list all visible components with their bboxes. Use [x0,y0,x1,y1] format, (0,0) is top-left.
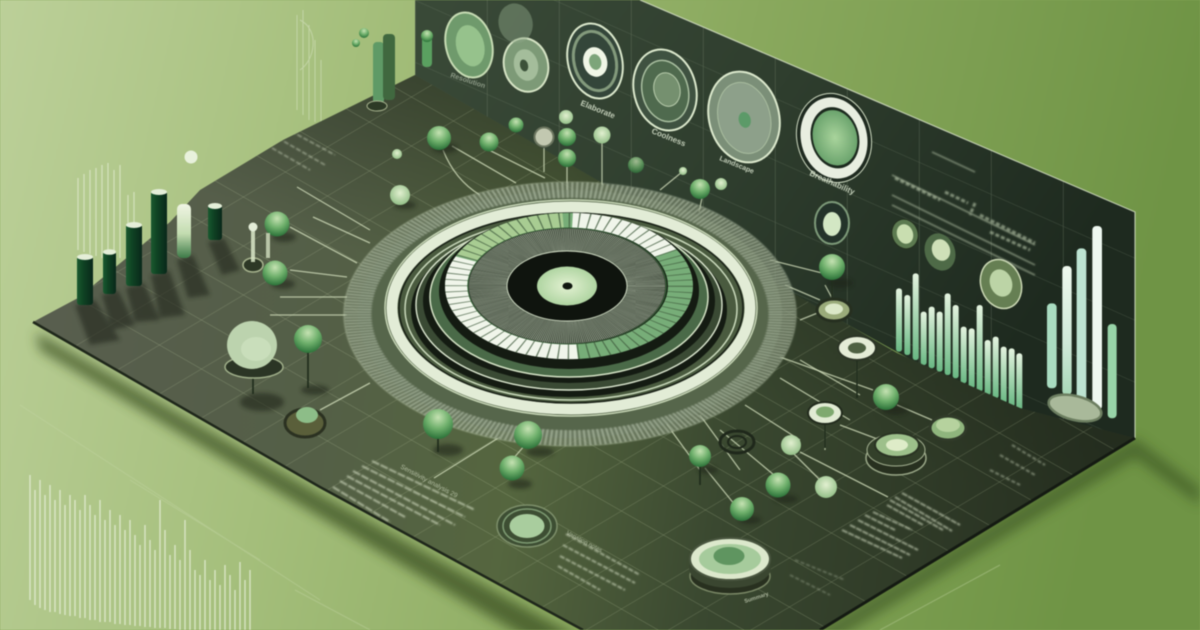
floor captions: Summary [744,591,770,605]
dial 4 [625,43,705,137]
floor captions [399,464,770,605]
wall labels [449,72,857,197]
top pillars [352,28,433,111]
black core [507,251,627,321]
target disc [497,505,557,547]
segmented ring [421,199,717,373]
wall small dials [815,202,1028,314]
wall labels: Elaborate [579,99,617,121]
dial 1 [439,7,499,83]
wall labels: Landscape [718,155,755,176]
wall labels: Breathability [808,169,857,197]
faint sketch: top pillars [297,10,321,122]
dial 5 [699,64,789,170]
base under tall bars [1046,390,1104,426]
panel: back wall [415,0,1135,438]
chart: thin wall bars [896,273,1022,410]
floor text blocks [272,128,1045,595]
tick ring [468,228,666,344]
board shadow: left front edge [36,332,583,630]
chart: tall wall bars [1047,226,1117,418]
button nodes [225,222,966,475]
pin stems [253,278,857,485]
faint bar chart: upper left [78,163,134,260]
outer tick ring [344,182,796,446]
pin shadows [240,143,908,524]
floor captions: Sensitivity analysis 29 [399,464,459,500]
stacked button [689,538,771,594]
floor captions: Variation notes [565,530,603,554]
wall data table [892,152,1035,275]
center disc [537,266,597,306]
bar group: left cylinders [75,189,240,345]
green node balls [184,110,899,521]
board shadow: right front edge and corner [800,438,1200,630]
white ring [392,207,750,409]
dial 3 [560,18,630,104]
dial 6 [787,85,881,191]
faint bar chart: bottom left [30,475,250,630]
connector lines [270,142,932,505]
dial 2 [489,0,554,97]
wall labels: Coolness [650,127,688,149]
central ring diagram [344,182,796,446]
stacked dark layers [411,223,727,397]
wall labels: Resolution [449,72,486,90]
